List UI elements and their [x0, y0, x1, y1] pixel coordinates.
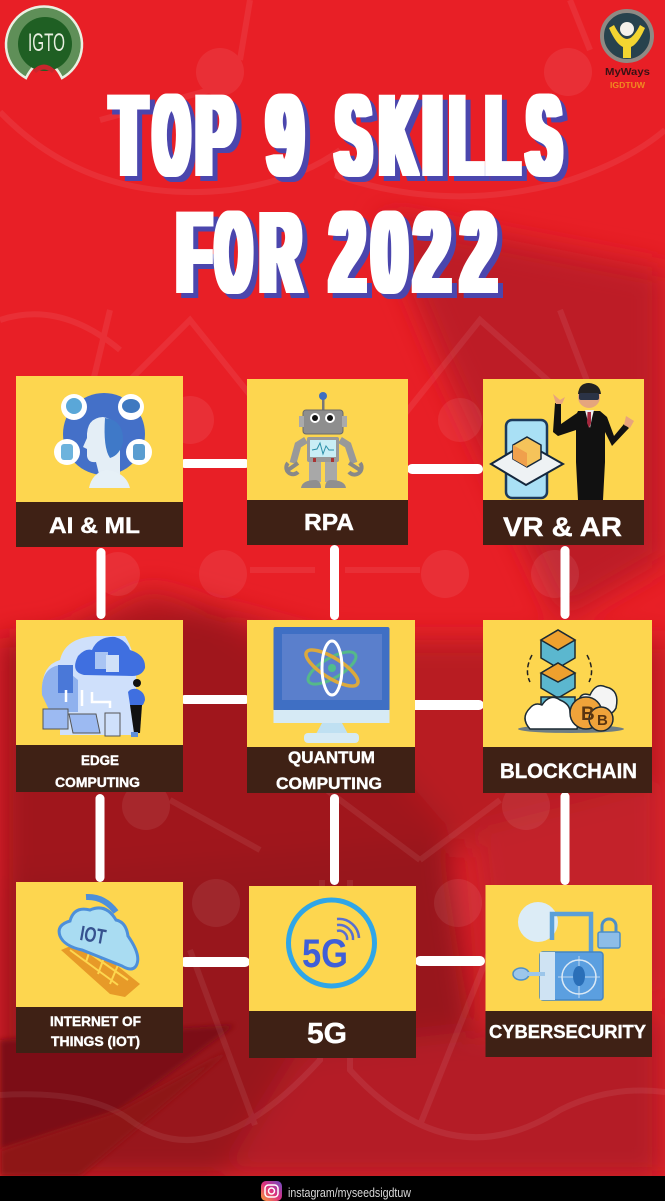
- title: R: [260, 189, 301, 317]
- icon: blocks clouds coins: [518, 630, 624, 733]
- text: S: [527, 72, 561, 200]
- logo: MyWays IGDTUW: MyWays: [605, 66, 650, 78]
- title: K: [380, 72, 416, 200]
- logo: MyWays IGDTUW: [602, 11, 652, 90]
- instagram handle: instagram/myseedsigdtuw: [288, 1185, 411, 1200]
- panel: Quantum Computing: COMPUTING: [276, 774, 382, 793]
- footer bar: [0, 1176, 665, 1201]
- label: AI & ML: [49, 513, 140, 538]
- panel: Quantum Computing: [247, 620, 415, 793]
- panel: Cybersecurity: [486, 885, 652, 1057]
- panel: AI & ML: [16, 376, 183, 547]
- icon: AR phone and VR man: [491, 383, 634, 500]
- icon: blocks clouds coins: B: [597, 712, 608, 729]
- title: 2: [414, 189, 450, 317]
- title: F: [177, 189, 211, 317]
- icon: 5G ring: 5G: [302, 932, 348, 976]
- title: 9: [267, 72, 303, 200]
- logo: IGDTUW crest: [6, 7, 82, 78]
- title: L: [486, 72, 519, 200]
- title: [111, 72, 561, 317]
- label: 5G: [307, 1018, 347, 1050]
- panel: VR & AR: [483, 379, 644, 545]
- label: EDGE: [81, 753, 119, 768]
- label: QUANTUM: [288, 748, 375, 767]
- label: RPA: [304, 509, 354, 535]
- panel: Edge Computing: COMPUTING: [55, 775, 140, 790]
- title: S: [336, 72, 371, 200]
- icon: IoT cloud on circuit: [59, 897, 140, 997]
- title: T: [111, 72, 146, 200]
- title: 0: [372, 189, 407, 317]
- icon: robot: [286, 392, 362, 488]
- panel: 5G: [249, 886, 416, 1058]
- icon: 5G ring: [288, 900, 374, 986]
- icon: blocks clouds coins: B: [581, 704, 595, 725]
- panel: RPA: [247, 379, 408, 545]
- label: CYBERSECURITY: [489, 1022, 646, 1042]
- icon: instagram: [261, 1181, 282, 1201]
- panel: Blockchain: [483, 620, 652, 793]
- label: VR & AR: [503, 512, 622, 542]
- logo: MyWays IGDTUW: IGDTUW: [610, 81, 645, 90]
- logo: IGDTUW crest: IGTO: [28, 29, 65, 57]
- label: BLOCKCHAIN: [500, 760, 637, 783]
- title: P: [196, 72, 233, 200]
- icon: monitor with atom: [274, 627, 390, 743]
- icon: cloud devices and person: [42, 636, 145, 737]
- title: I: [422, 72, 444, 200]
- panel: Internet of Things: THINGS (IOT): [51, 1034, 140, 1049]
- icon: IoT cloud on circuit: IOT: [78, 922, 108, 949]
- title: 2: [461, 189, 496, 317]
- panel: Internet of Things: [16, 882, 183, 1053]
- connectors: [96, 459, 570, 967]
- panel: Edge Computing: [16, 620, 183, 792]
- icon: padlock and key: [513, 902, 620, 1000]
- title: O: [154, 72, 189, 200]
- title: O: [216, 189, 251, 317]
- title: L: [450, 72, 482, 200]
- label: INTERNET OF: [50, 1014, 141, 1029]
- title: 2: [330, 189, 365, 317]
- icon: AI head with brain: [54, 393, 152, 488]
